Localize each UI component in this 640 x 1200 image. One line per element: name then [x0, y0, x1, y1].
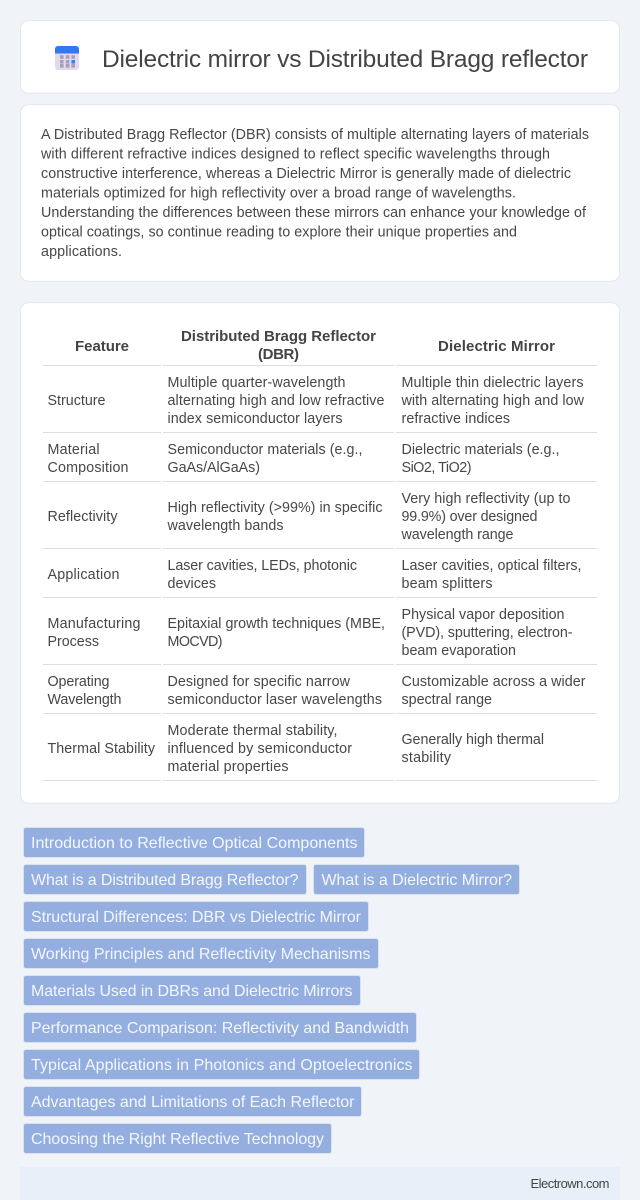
panel: introduction [20, 105, 620, 281]
tag: structural differences [24, 902, 368, 932]
table row: reflectivity: Reflectivity [48, 509, 118, 525]
table row: thermal stability: Moderate thermal stability, [168, 723, 338, 739]
table row: thermal stability: stability [402, 750, 452, 766]
table header row: Distributed Bragg Reflector [181, 328, 376, 345]
table row: operating wavelength: Operating [48, 674, 110, 690]
table row: reflectivity: wavelength bands [166, 518, 284, 534]
tag: what is a dielectric mirror: What is a Dielectric Mirror? [322, 872, 512, 889]
table row: operating wavelength: semiconductor laser wavelengths [168, 692, 382, 708]
text block: introduction paragraph: materials optimized for high reflectivity over a broad range of wavelengths. [41, 186, 516, 202]
tag: structural differences: Structural Differences: DBR vs Dielectric Mirror [31, 909, 362, 926]
tag: what is a DBR: What is a Distributed Bragg Reflector? [31, 872, 299, 889]
table row: application: Laser cavities, optical filters, [402, 558, 582, 574]
section tags [24, 828, 520, 1154]
panel: comparison table [20, 303, 620, 803]
table row: manufacturing process: Manufacturing [48, 616, 141, 632]
table row: operating wavelength: Designed for specific narrow [168, 674, 351, 690]
tag: materials: Materials Used in DBRs and Dielectric Mirrors [31, 983, 352, 1000]
table row: manufacturing process [43, 607, 597, 665]
table header row: (DBR) [258, 346, 299, 363]
table row: manufacturing process: Epitaxial growth techniques (MBE, [168, 616, 385, 632]
footer [20, 1167, 620, 1200]
table row: operating wavelength [43, 674, 597, 714]
tag: choosing technology [24, 1124, 332, 1154]
table header row: Dielectric Mirror [438, 338, 555, 355]
table row: operating wavelength: Customizable across a wider [402, 674, 586, 690]
tag: choosing technology: Choosing the Right Reflective Technology [31, 1131, 324, 1148]
tag: performance comparison [24, 1012, 416, 1042]
table row: thermal stability: influenced by semiconductor [168, 741, 352, 757]
table row: material composition: Semiconductor materials (e.g., [168, 442, 362, 458]
table row: structure: Structure [48, 393, 106, 409]
text block: introduction paragraph: constructive interference, whereas a Dielectric Mirror is generally made of dielectric [41, 166, 571, 182]
tag: introduction [24, 828, 364, 858]
tag: advantages and limitations [24, 1086, 362, 1116]
table row: manufacturing process: beam evaporation [402, 643, 516, 659]
table row: structure [43, 375, 597, 433]
table row: structure: Multiple quarter-wavelength [168, 375, 346, 391]
tag: working principles: Working Principles and Reflectivity Mechanisms [31, 946, 370, 963]
table row: thermal stability: Thermal Stability [48, 741, 156, 757]
table row: structure: with alternating high and low [400, 393, 585, 409]
table row: material composition: Dielectric materials (e.g., [402, 442, 560, 458]
table row: operating wavelength: spectral range [402, 692, 492, 708]
table row: manufacturing process: MOCVD) [168, 634, 222, 650]
table row: reflectivity: Very high reflectivity (up to [402, 491, 571, 507]
table row: material composition: Composition [48, 460, 129, 476]
tag: materials [24, 976, 360, 1006]
panel: header [20, 20, 620, 93]
tag: typical applications [24, 1050, 420, 1080]
table row: operating wavelength: Wavelength [48, 692, 122, 708]
table row: manufacturing process: Physical vapor deposition [402, 607, 565, 623]
icon: calendar [55, 46, 79, 70]
title: Dielectric mirror vs Distributed Bragg reflector [102, 46, 588, 73]
tag: what is a DBR [24, 864, 306, 894]
table row: application: beam splitters [402, 576, 492, 592]
tag: what is a dielectric mirror [314, 864, 520, 894]
tag: introduction: Introduction to Reflective Optical Components [31, 835, 358, 852]
text block: introduction paragraph [40, 127, 589, 260]
table row: structure: alternating high and low refractive [168, 393, 385, 409]
table row: thermal stability: Generally high thermal [402, 732, 544, 748]
table row: thermal stability: material properties [168, 759, 288, 775]
table row: material composition [43, 442, 597, 482]
table row: structure: refractive indices [402, 411, 510, 427]
table row: material composition: GaAs/AlGaAs) [168, 460, 260, 476]
table row: material composition: SiO2, TiO2) [402, 460, 472, 476]
table row: structure: index semiconductor layers [168, 411, 342, 427]
tag: advantages and limitations: Advantages and Limitations of Each Reflector [31, 1094, 355, 1111]
table row: reflectivity: wavelength range [400, 527, 514, 543]
footer: Electrown.com [530, 1176, 610, 1191]
table row: reflectivity: High reflectivity (>99%) in specific [168, 500, 382, 516]
table row: application: Application [48, 567, 120, 583]
table row: application: Laser cavities, LEDs, photonic [168, 558, 357, 574]
table row: thermal stability [43, 723, 597, 781]
table row: application: devices [168, 576, 216, 592]
text block: introduction paragraph: Understanding the differences between these mirrors can enhance your knowledge of [41, 205, 586, 221]
table row: application [43, 558, 597, 598]
text block: introduction paragraph: optical coatings, so continue reading to explore their unique properties and [41, 224, 517, 240]
text block: introduction paragraph: A Distributed Bragg Reflector (DBR) consists of multiple alternating layers of materials [41, 127, 589, 143]
table row: structure: Multiple thin dielectric layers [402, 375, 584, 391]
text block: introduction paragraph: with different refractive indices designed to reflect specific wavelengths through [40, 146, 550, 162]
text block: introduction paragraph: applications. [41, 244, 122, 260]
table header row: Feature [75, 338, 129, 355]
table row: manufacturing process: Process [48, 634, 99, 650]
table row: reflectivity: 99.9%) over designed [402, 509, 538, 525]
tag: working principles [24, 938, 378, 968]
table header row [43, 328, 597, 366]
tag: typical applications: Typical Applications in Photonics and Optoelectronics [31, 1057, 412, 1074]
tag: performance comparison: Performance Comparison: Reflectivity and Bandwidth [31, 1020, 409, 1037]
table row: manufacturing process: (PVD), sputtering, electron- [402, 625, 573, 641]
table row: material composition: Material [48, 442, 100, 458]
table row: reflectivity [43, 491, 597, 549]
